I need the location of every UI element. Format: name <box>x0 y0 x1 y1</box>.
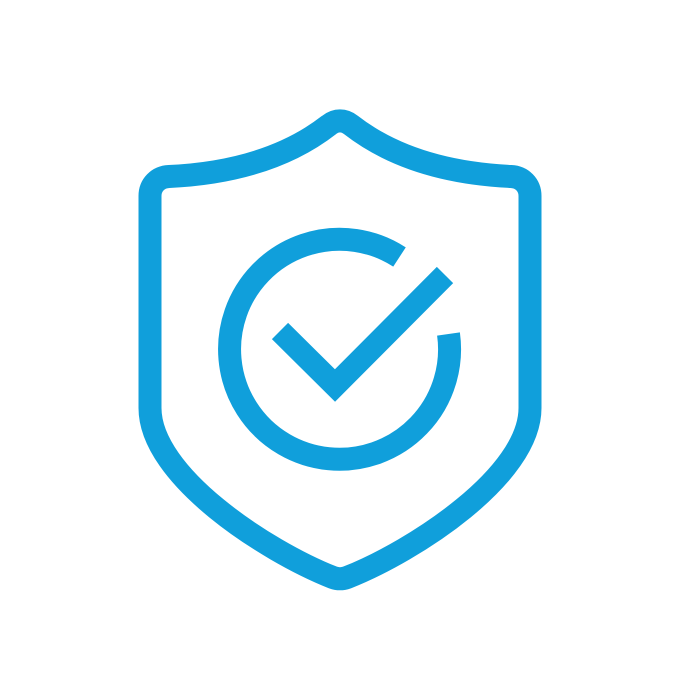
check mark <box>280 275 445 386</box>
shield outline <box>150 121 530 579</box>
progress ring <box>230 239 450 459</box>
